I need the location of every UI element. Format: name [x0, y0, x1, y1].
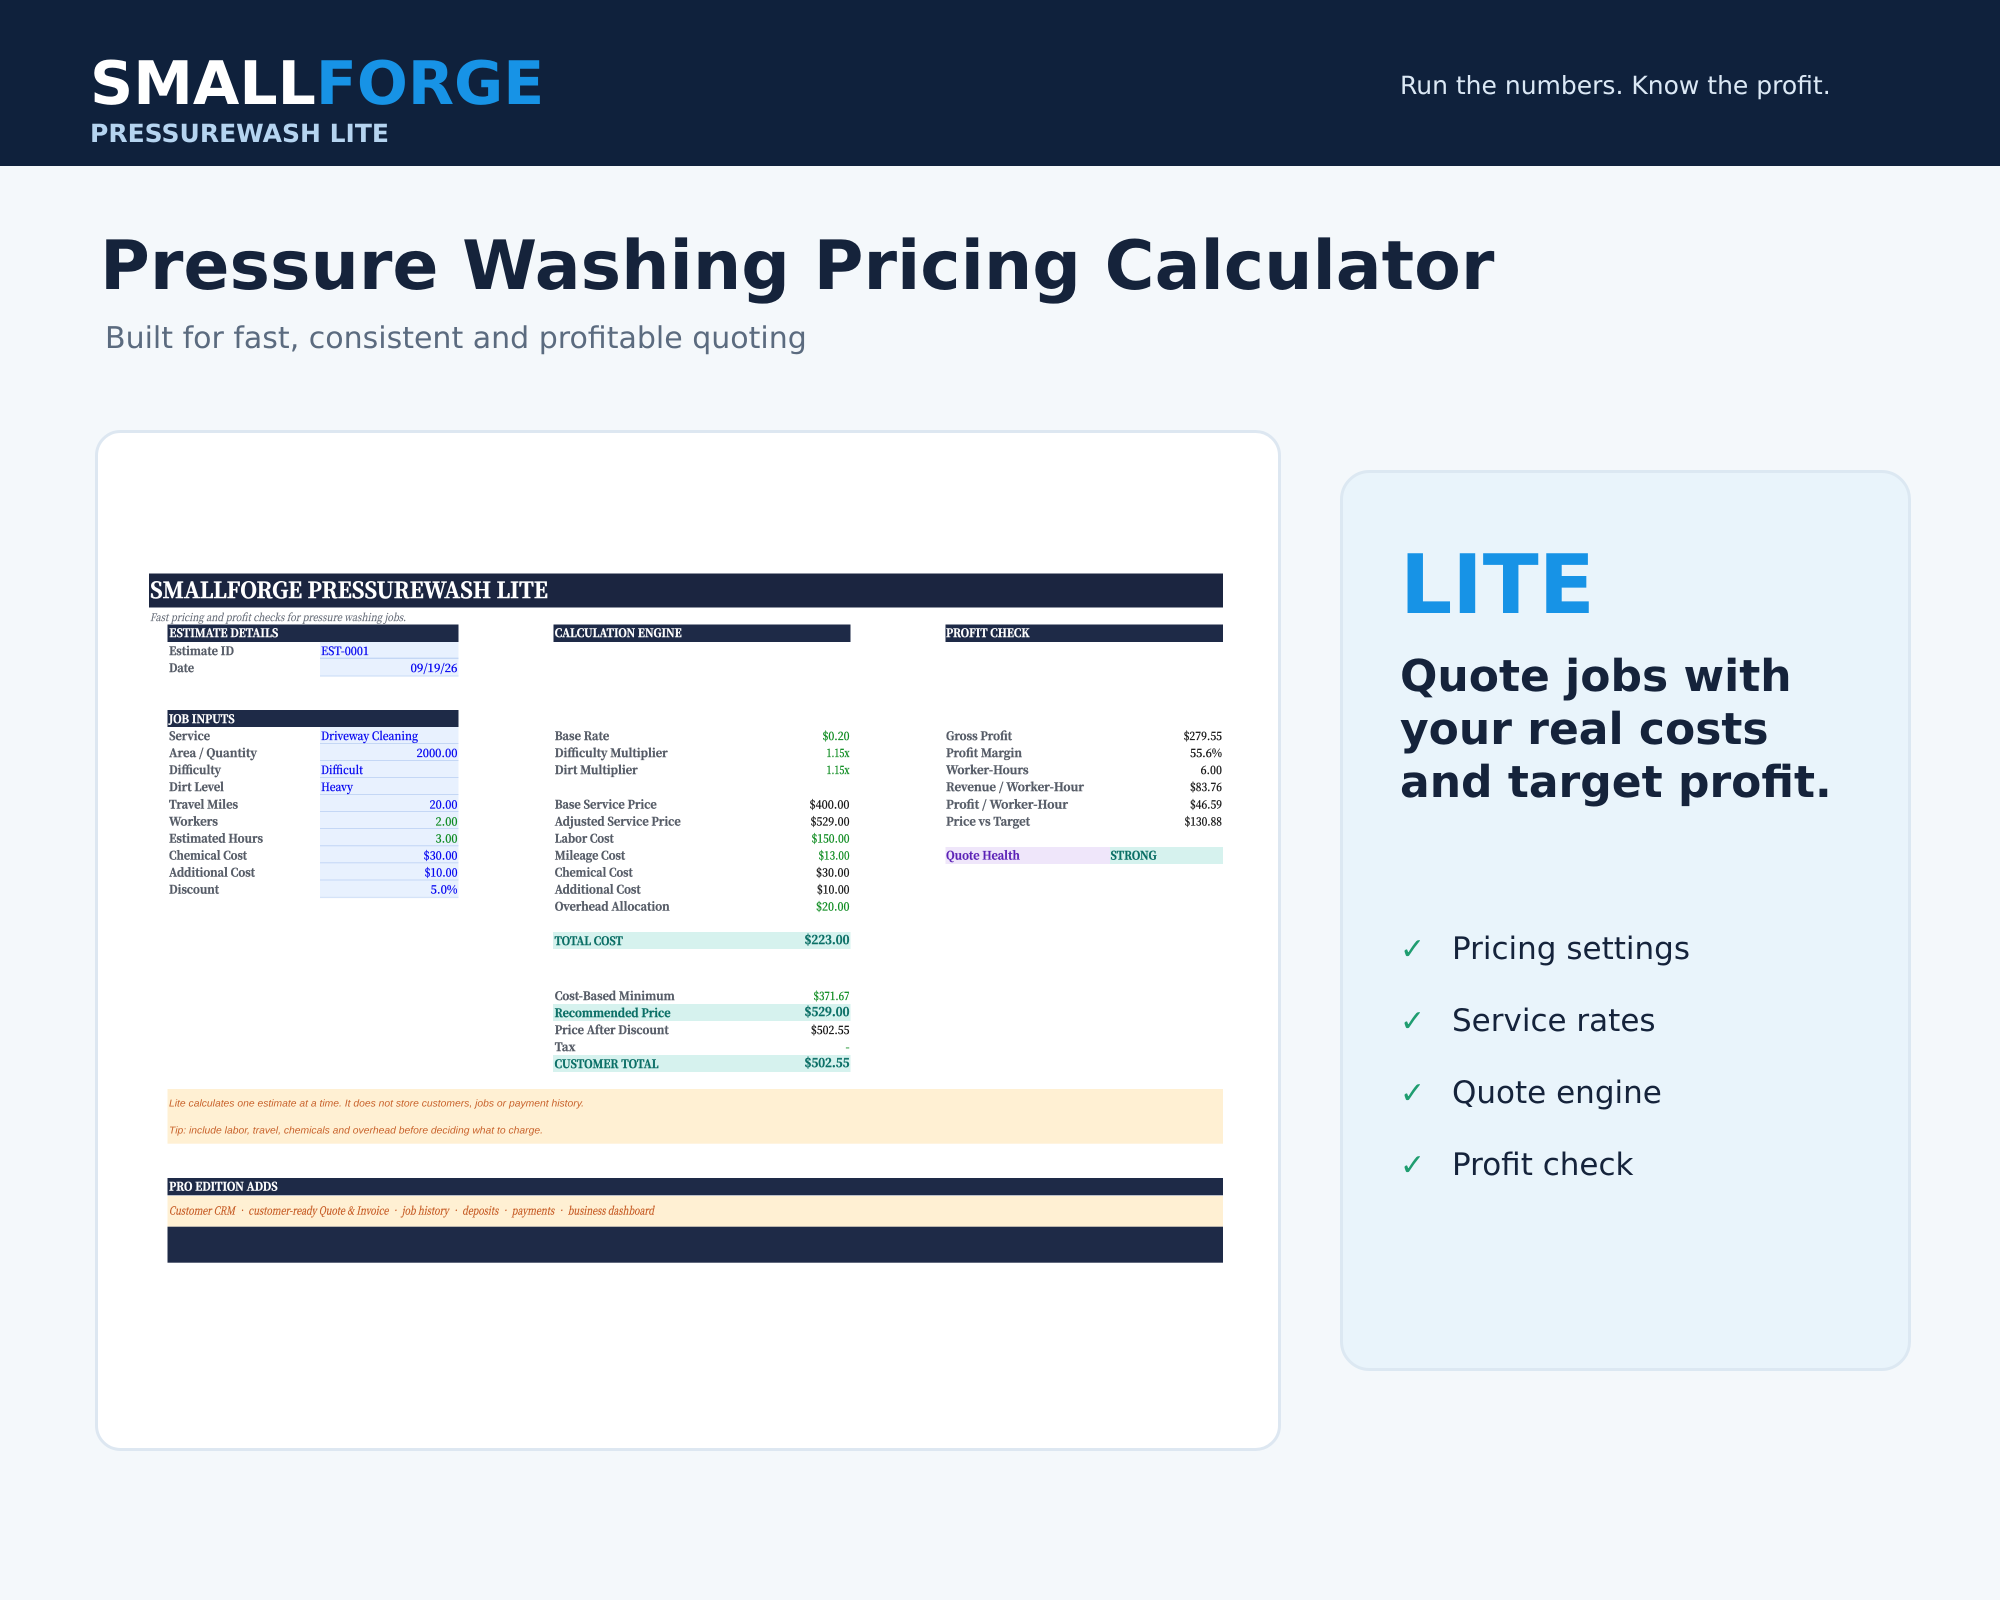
row: date: 09/19/26: [410, 660, 458, 676]
row: total cost: $223.00: [804, 930, 850, 948]
row: worker-hours: [946, 762, 1222, 778]
row: service: Driveway Cleaning: [321, 728, 418, 744]
row: area: 2000.00: [416, 745, 458, 761]
row: estimate id: [169, 642, 458, 659]
row: difficulty multiplier: 1.15x: [826, 745, 850, 761]
item: service rates: ✓: [1400, 1004, 1425, 1039]
row: base service price: $400.00: [810, 796, 850, 812]
row: gross profit: Gross Profit: [946, 728, 1012, 744]
row: customer total: CUSTOMER TOTAL: [554, 1056, 658, 1072]
note line 2: Tip: include labor, travel, chemicals and overhead before deciding what to charge.: [169, 1126, 543, 1137]
item: service rates: Service rates: [1452, 1003, 1656, 1039]
row: overhead allocation: [555, 899, 850, 915]
row: labor cost: $150.00: [812, 830, 850, 846]
row: labor cost: [555, 830, 850, 846]
row: cost-based minimum: Cost-Based Minimum: [555, 988, 675, 1004]
pro features strip: Customer CRM • customer-ready Quote & Invoice • job history • deposits • payments • business dashboard: [169, 1203, 655, 1219]
row: profit per worker-hour: $46.59: [1190, 796, 1222, 812]
row: dirt level: [169, 778, 458, 795]
row: price after discount: $502.55: [811, 1022, 850, 1038]
row: travel miles: Travel Miles: [169, 796, 238, 812]
row: difficulty multiplier: Difficulty Multiplier: [555, 745, 668, 761]
row: customer total: $502.55: [804, 1053, 850, 1071]
row: discount: Discount: [169, 882, 219, 898]
row: revenue per worker-hour: Revenue / Worker-Hour: [946, 779, 1084, 795]
headline: [1400, 651, 1832, 808]
row: recommended price: $529.00: [804, 1002, 850, 1020]
tagline: Run the numbers. Know the profit.: [1400, 71, 1831, 100]
row: total cost: [553, 930, 850, 949]
row: additional cost: Additional Cost: [555, 882, 641, 898]
row: quote health: Quote Health: [946, 847, 1020, 863]
row: gross profit: [946, 728, 1222, 744]
sheet subtitle: Fast pricing and profit checks for pressure washing jobs.: [150, 610, 406, 625]
row: cost-based minimum: [555, 988, 850, 1004]
row: overhead allocation: Overhead Allocation: [555, 899, 670, 915]
row: dirt level: Dirt Level: [169, 779, 224, 795]
row: discount: 5.0%: [430, 882, 458, 898]
pro features strip: [168, 1196, 1223, 1227]
row: recommended price: Recommended Price: [554, 1005, 671, 1021]
row: area: Area / Quantity: [169, 745, 257, 761]
section: profit check: [946, 624, 1223, 864]
row: base rate: [555, 728, 850, 744]
row: travel miles: [169, 795, 458, 812]
note box: [168, 1089, 1223, 1144]
row: chemical cost: $30.00: [816, 864, 850, 880]
row: difficulty: [169, 761, 458, 778]
row: recommended price: [553, 1002, 850, 1021]
edition label: LITE: [1400, 538, 1595, 633]
row: mileage cost: [555, 847, 850, 863]
row: adjusted service price: Adjusted Service Price: [555, 813, 681, 829]
item: pricing settings: ✓: [1400, 932, 1425, 967]
section heading: [168, 710, 458, 727]
panel: lite summary: [1342, 472, 1910, 1370]
item: profit check: Profit check: [1452, 1147, 1634, 1183]
sheet title bar: SMALLFORGE PRESSUREWASH LITE: [150, 574, 548, 605]
row: additional cost: [169, 863, 458, 881]
row: quote health: [946, 847, 1223, 864]
row: worker-hours: Worker-Hours: [946, 762, 1029, 778]
section heading: PROFIT CHECK: [946, 625, 1030, 641]
note line 1: Lite calculates one estimate at a time. It does not store customers, jobs or payment history.: [169, 1099, 584, 1110]
row: tax: Tax: [555, 1039, 576, 1055]
row: chemical cost: Chemical Cost: [555, 864, 633, 880]
row: base rate: Base Rate: [555, 728, 610, 744]
row: price vs target: $130.88: [1184, 813, 1222, 829]
row: mileage cost: $13.00: [818, 847, 850, 863]
row: cost-based minimum: $371.67: [814, 988, 850, 1004]
item: profit check: ✓: [1400, 1148, 1425, 1183]
section: calculation engine: [553, 624, 850, 1072]
row: dirt multiplier: Dirt Multiplier: [555, 762, 638, 778]
panel: spreadsheet preview: [96, 432, 1280, 1450]
row: dirt multiplier: 1.15x: [826, 762, 850, 778]
row: workers: 2.00: [436, 813, 458, 829]
row: profit margin: [946, 745, 1222, 761]
row: additional cost: $10.00: [817, 882, 850, 898]
row: estimate id: EST-0001: [321, 643, 369, 659]
checklist: [1400, 931, 1690, 1183]
row: adjusted service price: [555, 813, 850, 829]
row: price vs target: [946, 813, 1222, 829]
row: gross profit: $279.55: [1184, 728, 1222, 744]
row: price after discount: [555, 1022, 850, 1038]
header band: [0, 0, 2000, 166]
section heading: JOB INPUTS: [168, 711, 235, 727]
row: date: Date: [169, 660, 194, 676]
row: travel miles: 20.00: [430, 796, 458, 812]
row: additional cost: [555, 882, 850, 898]
row: customer total: [553, 1053, 850, 1072]
product name: PRESSUREWASH LITE: [90, 119, 389, 148]
row: price after discount: Price After Discount: [555, 1022, 669, 1038]
row: mileage cost: Mileage Cost: [555, 847, 626, 863]
row: labor cost: Labor Cost: [555, 830, 614, 846]
row: price vs target: Price vs Target: [946, 813, 1030, 829]
row: dirt level: Heavy: [321, 779, 353, 795]
row: total cost: TOTAL COST: [554, 933, 623, 949]
section heading: [554, 624, 850, 642]
section heading: ESTIMATE DETAILS: [169, 625, 278, 641]
row: adjusted service price: $529.00: [810, 813, 850, 829]
pro heading: PRO EDITION ADDS: [169, 1179, 278, 1195]
row: service: Service: [169, 728, 210, 744]
row: profit margin: Profit Margin: [946, 745, 1022, 761]
sheet title bar: [149, 574, 1223, 608]
section heading: CALCULATION ENGINE: [555, 625, 682, 641]
item: quote engine: ✓: [1400, 1076, 1425, 1111]
row: estimated hours: Estimated Hours: [169, 830, 263, 846]
row: profit margin: 55.6%: [1190, 745, 1222, 761]
row: profit per worker-hour: [946, 796, 1222, 812]
row: difficulty: Difficult: [321, 762, 364, 778]
headline: your real costs: [1400, 704, 1769, 755]
brand logo wordmark: SMALLFORGE: [90, 49, 544, 119]
section heading: [168, 624, 458, 642]
row: service: [169, 727, 458, 744]
section: job inputs: [168, 710, 458, 898]
pro edition block: [168, 1178, 1223, 1263]
row: estimate id: Estimate ID: [169, 643, 234, 659]
row: workers: Workers: [169, 813, 218, 829]
row: chemical cost: Chemical Cost: [169, 847, 247, 863]
row: revenue per worker-hour: [946, 779, 1222, 795]
title: Pressure Washing Pricing Calculator: [100, 227, 1495, 306]
row: worker-hours: 6.00: [1201, 762, 1222, 778]
row: additional cost: $10.00: [424, 864, 458, 880]
row: chemical cost: [555, 864, 850, 880]
row: revenue per worker-hour: $83.76: [1190, 779, 1222, 795]
row: tax: [555, 1039, 850, 1055]
dark footer band: [168, 1227, 1223, 1263]
row: discount: [169, 880, 458, 898]
row: estimated hours: 3.00: [436, 830, 458, 846]
row: base service price: Base Service Price: [555, 796, 657, 812]
row: difficulty multiplier: [555, 745, 850, 761]
headline: and target profit.: [1400, 757, 1832, 808]
row: estimated hours: [169, 829, 458, 846]
row: date: [169, 659, 458, 677]
row: tax: -: [845, 1039, 850, 1055]
row: chemical cost: [169, 846, 458, 864]
row: difficulty: Difficulty: [169, 762, 221, 778]
row: quote health: STRONG: [1110, 847, 1157, 863]
row: base service price: [555, 796, 850, 812]
row: additional cost: Additional Cost: [169, 864, 255, 880]
row: area: [169, 744, 458, 761]
section: estimate details: [168, 624, 458, 677]
row: profit per worker-hour: Profit / Worker-Hour: [946, 796, 1068, 812]
item: pricing settings: Pricing settings: [1452, 931, 1690, 967]
row: dirt multiplier: [555, 762, 850, 778]
row: overhead allocation: $20.00: [816, 899, 850, 915]
headline: Quote jobs with: [1400, 651, 1792, 702]
row: workers: [169, 812, 458, 829]
item: quote engine: Quote engine: [1452, 1075, 1662, 1111]
section heading: [946, 624, 1223, 642]
row: base rate: $0.20: [822, 728, 850, 744]
row: chemical cost: $30.00: [424, 847, 458, 863]
subtitle: Built for fast, consistent and profitable quoting: [105, 321, 807, 356]
